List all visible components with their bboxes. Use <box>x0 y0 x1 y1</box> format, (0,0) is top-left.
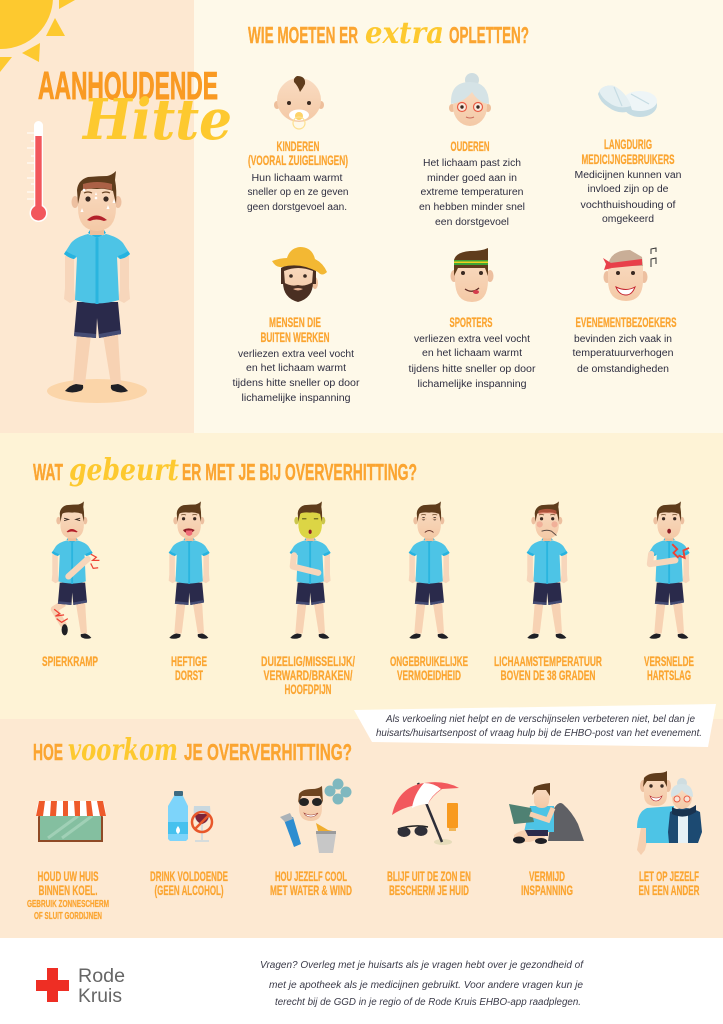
text: vermoeidheid: ONGEBRUIKELIJKE <box>390 653 468 669</box>
icon: shop awning <box>36 801 106 842</box>
text: let op jezelf <box>638 868 700 898</box>
text: buitenwerkers <box>232 314 360 404</box>
text: duizelig: HOOFDPIJN <box>284 681 332 697</box>
heading: hoe voorkom je oververhitting: voorkom <box>68 733 178 768</box>
heading: wat gebeurt er met je bij oververhitting <box>33 453 417 488</box>
figure: lichaamstemperatuur <box>527 501 568 639</box>
logo: rode kruis: Kruis <box>78 986 122 1007</box>
icon: sporter with headband <box>450 248 494 302</box>
heading: hoe voorkom je oververhitting <box>33 733 352 768</box>
text: versnelde hartslag: HARTSLAG <box>647 667 691 683</box>
icon: cool man, spray, fan and bucket <box>280 778 352 853</box>
heading: hoe voorkom je oververhitting: JE OVERVERHITTING? <box>184 739 352 765</box>
text: medicijngebruikers: Medicijnen kunnen van <box>574 170 682 181</box>
text: kinderen <box>247 138 348 213</box>
text: vermijd inspanning: VERMIJD <box>529 868 565 884</box>
text: houd uw huis koel <box>27 868 109 922</box>
text: duizelig: VERWARD/BRAKEN/ <box>264 667 353 683</box>
text: evenementbezoekers: bevinden zich vaak in <box>574 334 672 345</box>
text: heftige dorst: DORST <box>175 667 203 683</box>
text: buitenwerkers: lichamelijke inspanning <box>242 393 350 404</box>
title: AANHOUDENDE <box>38 65 218 108</box>
text: ouderen: Het lichaam past zich <box>423 158 521 169</box>
text: heftige dorst <box>171 653 207 683</box>
text: drink voldoende: DRINK VOLDOENDE <box>150 868 228 884</box>
text: lichaamstemperatuur <box>494 653 602 683</box>
text: buitenwerkers: BUITEN WERKEN <box>260 329 330 345</box>
text: drink voldoende: (GEEN ALCOHOL) <box>154 882 224 898</box>
heading: wie moeten er extra opletten <box>248 16 529 51</box>
group: buitenwerkers <box>232 247 360 404</box>
text: vermoeidheid: VERMOEIDHEID <box>397 667 461 683</box>
text: medicijngebruikers: LANGDURIG <box>604 136 652 152</box>
text: houd uw huis koel: OF SLUIT GORDIJNEN <box>34 910 102 922</box>
icon: pills <box>598 86 657 117</box>
icon: grandmother <box>449 73 491 126</box>
logo: rode kruis: Rode <box>78 966 125 987</box>
heading: wat gebeurt er met je bij oververhitting: gebeurt <box>69 453 179 488</box>
text: evenementbezoekers: temperatuurverhogen <box>572 348 674 359</box>
text: buitenwerkers: MENSEN DIE <box>269 314 321 330</box>
icon: baby <box>274 76 324 129</box>
text: buitenwerkers: tijdens hitte sneller op door <box>232 378 360 389</box>
text: sporters <box>408 314 536 390</box>
text: hou jezelf cool: MET WATER & WIND <box>270 882 352 898</box>
heading: wat gebeurt er met je bij oververhitting: WAT <box>33 459 63 485</box>
text: blijf uit de zon: BLIJF UIT DE ZON EN <box>387 868 471 884</box>
panel: prevention <box>0 719 723 938</box>
icon: thermometer <box>27 121 48 222</box>
text: houd uw huis koel: GEBRUIK ZONNESCHERM <box>27 898 109 910</box>
title: Hitte <box>81 87 232 153</box>
heading: wie moeten er extra opletten: OPLETTEN? <box>449 22 529 48</box>
icon: man with grandmother <box>637 771 702 855</box>
text: questions: met je apotheek als je medicijnen gebruikt. Voor andere vragen kun je <box>269 980 583 991</box>
group: ouderen <box>419 73 525 228</box>
text: duizelig: DUIZELIG/MISSELIJK/ <box>261 653 355 669</box>
text: drink voldoende <box>150 868 228 898</box>
text: houd uw huis koel: BINNEN KOEL. <box>38 882 98 898</box>
text: questions <box>260 960 584 1008</box>
text: heftige dorst: HEFTIGE <box>171 653 207 669</box>
text: ouderen: en hebben minder snel <box>419 202 525 213</box>
icon: sun <box>0 0 75 72</box>
text: versnelde hartslag <box>644 653 694 683</box>
icon: festival visitor with bandana <box>603 248 656 301</box>
text: medicijngebruikers: invloed zijn op de <box>588 184 669 195</box>
text: vermijd inspanning: INSPANNING <box>521 882 573 898</box>
text: duizelig <box>261 653 355 697</box>
figure: vermoeidheid <box>409 501 450 639</box>
text: blijf uit de zon: BESCHERM JE HUID <box>389 882 469 898</box>
heading: wie moeten er extra opletten: extra <box>365 16 444 51</box>
text: sporters: tijdens hitte sneller op door <box>408 364 536 375</box>
text: evenementbezoekers <box>572 314 676 375</box>
text: medicijngebruikers <box>574 136 682 225</box>
text: sporters: verliezen extra veel vocht <box>414 334 530 345</box>
text: kinderen: sneller op en ze geven <box>248 187 348 198</box>
title <box>38 65 232 153</box>
text: sporters: lichamelijke inspanning <box>418 379 526 390</box>
text: hou jezelf cool: HOU JEZELF COOL <box>275 868 347 884</box>
group: sporters <box>408 248 536 390</box>
text: buitenwerkers: verliezen extra veel vocht <box>238 349 354 360</box>
icon: man with straw hat and beard <box>272 247 327 302</box>
text: ouderen: minder goed aan in <box>427 173 517 184</box>
text: ouderen <box>419 138 525 228</box>
text: vermijd inspanning <box>521 868 573 898</box>
text: medicijngebruikers: vochthuishouding of <box>580 200 676 211</box>
panel: symptoms <box>0 433 723 719</box>
figure: heftige dorst <box>169 501 210 639</box>
main character overheated <box>47 171 147 403</box>
text: medicijngebruikers: omgekeerd <box>602 214 654 225</box>
text: vermoeidheid <box>390 653 468 683</box>
group: evenementbezoekers <box>572 248 676 375</box>
text: kinderen: (VOORAL ZUIGELINGEN) <box>248 152 348 168</box>
icon: water bottle and no alcohol <box>168 791 212 841</box>
logo: rode kruis <box>36 966 125 1007</box>
callout: when to call the doctor <box>354 704 716 747</box>
group: medicijngebruikers <box>574 86 682 225</box>
text: sporters: en het lichaam warmt <box>422 348 522 359</box>
text: lichaamstemperatuur: BOVEN DE 38 GRADEN <box>500 667 596 683</box>
text: questions: Vragen? Overleg met je huisarts als je vragen hebt over je gezondheid of <box>260 960 584 971</box>
icon: parasol, sunglasses and sunscreen <box>392 782 459 845</box>
text: ouderen: OUDEREN <box>450 138 490 154</box>
text: ouderen: extreme temperaturen <box>420 187 524 198</box>
figure: duizelig <box>290 501 331 639</box>
text: kinderen: KINDEREN <box>276 138 320 154</box>
callout: when to call the doctor: huisarts/huisartsenpost of vraag hulp bij de EHBO-post van het evenement. <box>376 728 702 739</box>
text: questions: terecht bij de GGD in je regio of de Rode Kruis EHBO-app raadplegen. <box>275 997 581 1008</box>
text: kinderen: Hun lichaam warmt <box>252 173 343 184</box>
heading: hoe voorkom je oververhitting: HOE <box>33 739 63 765</box>
text: lichaamstemperatuur: LICHAAMSTEMPERATUUR <box>494 653 602 669</box>
panel: footer <box>0 938 723 1024</box>
text: hou jezelf cool <box>270 868 352 898</box>
text: ouderen: een dorstgevoel <box>435 217 509 228</box>
text: evenementbezoekers: de omstandigheden <box>577 364 669 375</box>
heading: wie moeten er extra opletten: WIE MOETEN ER <box>248 22 358 48</box>
figure: versnelde hartslag <box>649 501 690 639</box>
text: buitenwerkers: en het lichaam warmt <box>246 363 346 374</box>
panel: heat background and character <box>0 0 723 433</box>
icon: man reading by a rock <box>509 783 584 844</box>
figure: spierkramp <box>52 501 99 639</box>
callout: when to call the doctor: Als verkoeling niet helpt en de verschijnselen verbeteren niet, bel dan je <box>385 714 695 725</box>
text: sporters: SPORTERS <box>450 314 492 330</box>
group: kinderen <box>247 76 348 213</box>
text: blijf uit de zon <box>387 868 471 898</box>
text: spierkramp: SPIERKRAMP <box>42 653 98 669</box>
text: kinderen: geen dorstgevoel aan. <box>247 202 347 213</box>
text: houd uw huis koel: HOUD UW HUIS <box>38 868 98 884</box>
heading: wat gebeurt er met je bij oververhitting: ER MET JE BIJ OVERVERHITTING? <box>182 459 417 485</box>
